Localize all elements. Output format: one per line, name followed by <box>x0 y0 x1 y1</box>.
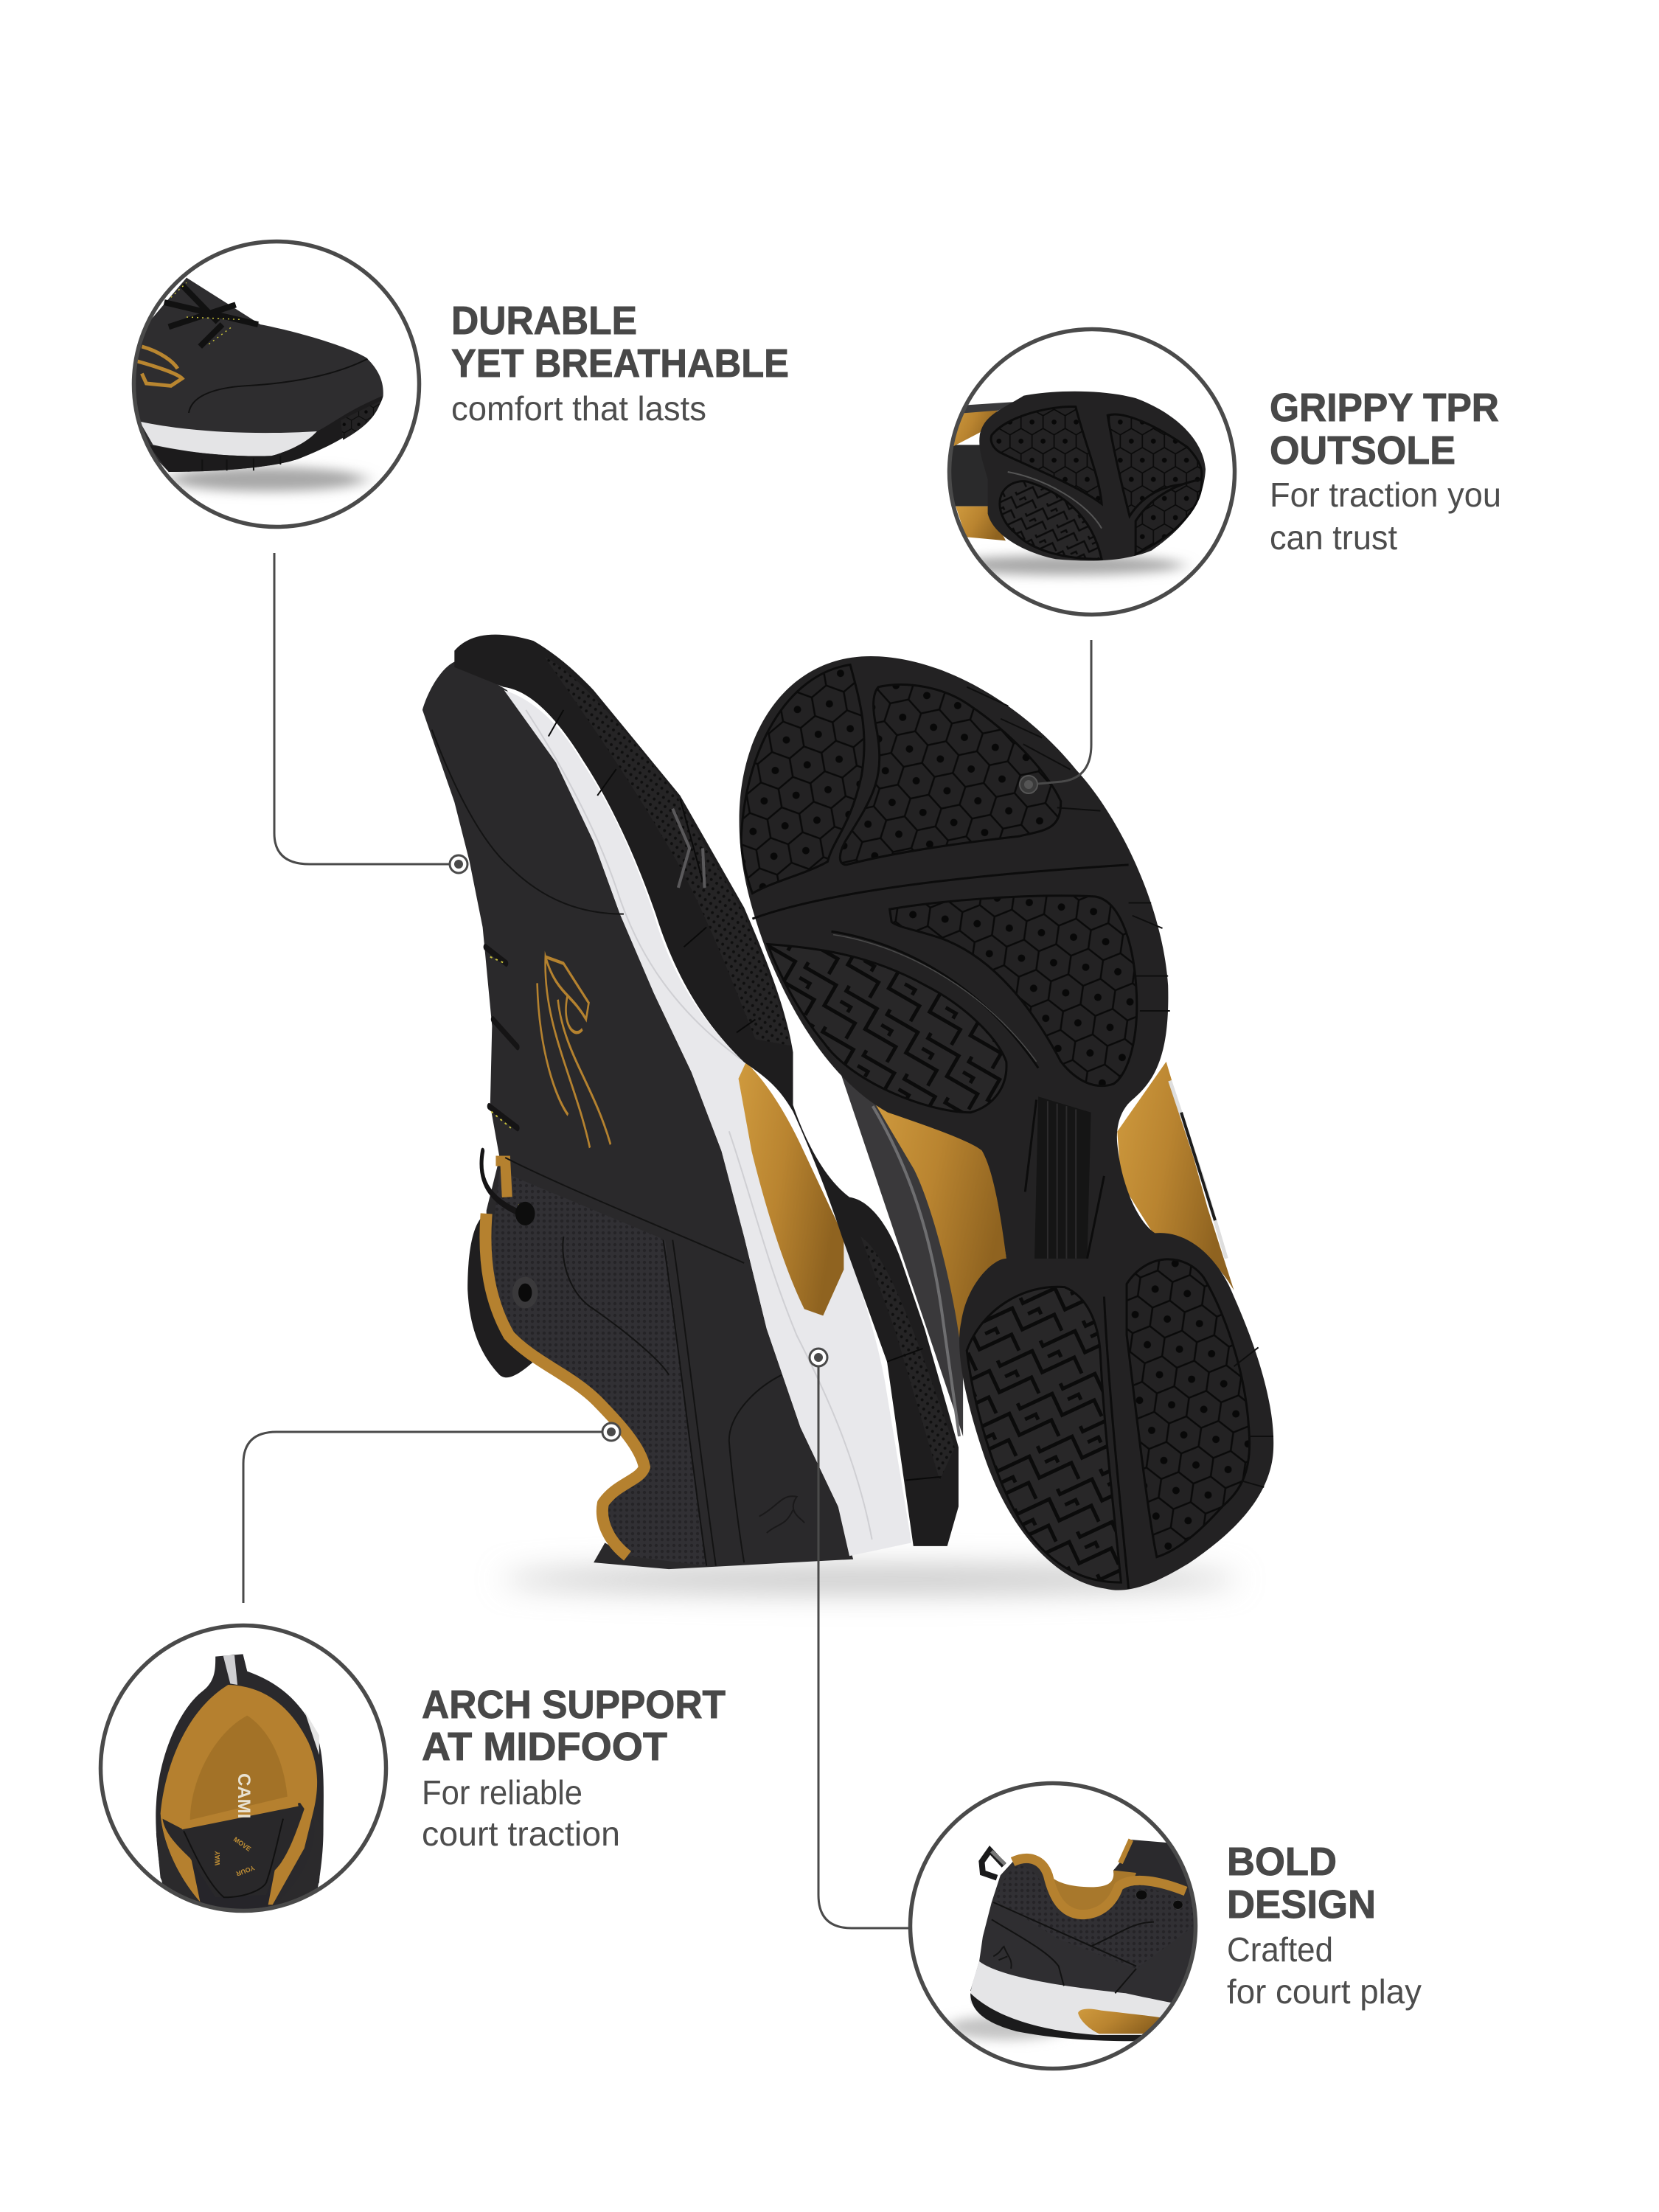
laces <box>164 285 258 347</box>
inset: toe of shoe <box>124 278 383 492</box>
marker arch <box>602 1423 620 1441</box>
outsole <box>979 392 1206 561</box>
marker sole <box>1020 776 1037 793</box>
hex tread forefoot left <box>741 665 864 894</box>
upper visible behind outsole <box>839 1068 1006 1436</box>
laces <box>481 947 529 1217</box>
hex tread forefoot top <box>840 684 1061 865</box>
toe stitching <box>189 359 367 470</box>
shoe upper <box>970 1861 1207 2045</box>
white midsole <box>504 690 911 1556</box>
heading line two: OUTSOLE <box>1270 428 1455 473</box>
leader line midsole <box>818 1366 908 1928</box>
far collar and tongue <box>1113 1840 1207 1897</box>
shadow <box>169 467 365 492</box>
pull tab <box>981 1850 1004 1878</box>
outsole tread texture <box>545 657 791 1046</box>
description: For traction you <box>1270 476 1501 514</box>
waist <box>946 445 992 507</box>
shoe outer <box>156 1654 324 1915</box>
callout: bold design <box>810 1349 1422 2069</box>
callout: grippy tpr outsole <box>944 329 1501 793</box>
ground shadow under shoes <box>501 1568 1239 1591</box>
tongue label move: MOVE <box>232 1835 252 1853</box>
hex tread heel <box>1127 1259 1250 1557</box>
circle ring <box>950 329 1234 615</box>
brand mark <box>993 1947 1012 1969</box>
circle ring <box>134 242 419 526</box>
hex tread forefoot right <box>890 896 1137 1086</box>
gold midfoot wedge <box>739 1062 844 1315</box>
maze tread forefoot <box>768 945 1006 1113</box>
description line two: court traction <box>422 1815 620 1853</box>
shadow <box>944 555 1183 575</box>
leader line sole <box>1038 640 1091 784</box>
description: comfort that lasts <box>451 389 706 428</box>
outsole edge <box>149 396 383 472</box>
gold collar <box>1013 1858 1186 1915</box>
circle ring <box>100 1625 386 1911</box>
left shoe side view <box>422 635 959 1569</box>
leader line toe <box>274 553 450 864</box>
side quarters <box>156 1814 324 1915</box>
leader line arch <box>243 1432 602 1603</box>
circle ring <box>910 1783 1196 2069</box>
heading: BOLD <box>1227 1840 1337 1884</box>
gold arch insert left <box>873 1100 1006 1338</box>
gold bottom <box>956 507 1006 540</box>
insole <box>190 1716 288 1820</box>
description line two: can trust <box>1270 518 1397 557</box>
description line two: for court play <box>1227 1972 1422 2011</box>
marker toe <box>450 855 467 873</box>
heel tab <box>467 1214 533 1377</box>
tongue label way: WAY <box>214 1851 221 1865</box>
insole wordmark: CAMI <box>234 1773 254 1818</box>
midsole <box>139 422 317 456</box>
maze tread heel <box>967 1287 1121 1582</box>
callout: durable yet breathable <box>124 242 789 873</box>
seams <box>992 1902 1154 1993</box>
callout: arch support at midfoot <box>100 1423 726 1915</box>
tread pods <box>991 407 1102 504</box>
waist ribs <box>1034 1096 1091 1259</box>
toe upper <box>124 278 383 472</box>
heading line two: YET BREATHABLE <box>451 341 789 386</box>
right shoe showing outsole <box>740 656 1273 1590</box>
marker midsole <box>810 1349 827 1366</box>
outsole edge <box>454 635 959 1546</box>
heading: DURABLE <box>451 299 637 343</box>
inset: insole top view <box>156 1654 324 1915</box>
collar interior <box>1013 1857 1136 1917</box>
heading line two: AT MIDFOOT <box>422 1725 667 1769</box>
heading line two: DESIGN <box>1227 1882 1376 1927</box>
description: For reliable <box>422 1773 582 1812</box>
eyelets <box>1136 1890 1147 1900</box>
shoe upper <box>422 661 853 1569</box>
eyelets <box>512 1277 538 1309</box>
tongue <box>162 1803 305 1897</box>
toe tread <box>341 400 381 440</box>
midsole <box>970 1961 1207 2035</box>
gold top <box>952 411 998 446</box>
pull tab stripe <box>223 1655 237 1685</box>
gold arch insert right <box>1117 1062 1234 1290</box>
inset: outsole <box>944 392 1206 575</box>
outsole <box>970 1993 1154 2041</box>
description: Crafted <box>1227 1930 1333 1969</box>
tongue label your: YOUR <box>234 1864 256 1878</box>
stitching seams <box>432 730 782 1566</box>
mesh panel <box>487 1171 706 1566</box>
gold brand logo <box>538 957 611 1148</box>
gold collar lining <box>485 1214 644 1556</box>
gold collar <box>161 1685 317 1905</box>
centre opening <box>190 1853 275 1915</box>
heel brand mark <box>759 1496 804 1533</box>
heading: GRIPPY TPR <box>1270 386 1499 430</box>
gold logo <box>137 347 182 386</box>
reflective side <box>305 1711 319 1755</box>
inset: heel of shoe <box>946 1840 1207 2045</box>
outsole base <box>740 656 1273 1590</box>
mesh panel <box>995 1865 1193 1969</box>
shadow <box>946 2015 1065 2040</box>
rim lugs <box>967 687 1273 1487</box>
gold wedge <box>1078 2008 1163 2034</box>
heading: ARCH SUPPORT <box>422 1683 726 1727</box>
